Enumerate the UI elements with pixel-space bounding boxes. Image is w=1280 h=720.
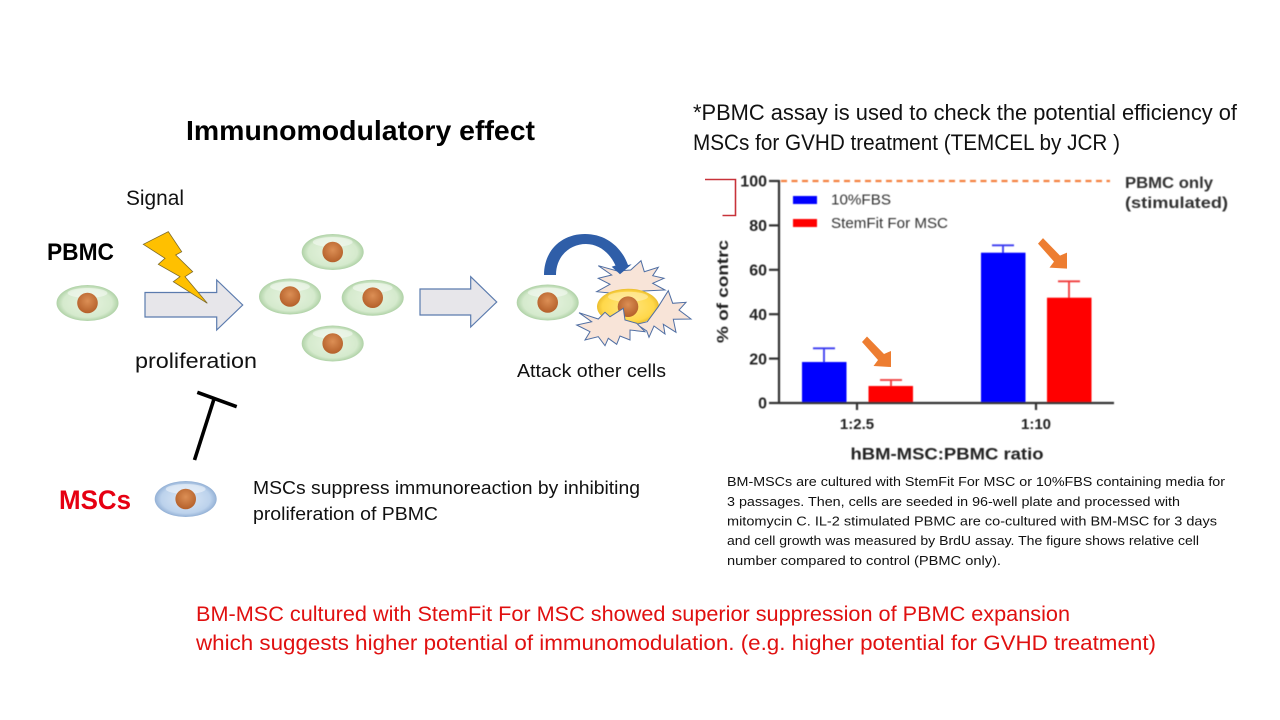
legend xyxy=(793,192,948,232)
x tick labels xyxy=(840,416,1051,433)
red bracket xyxy=(705,180,736,216)
icon: attacking cell xyxy=(517,284,579,320)
arrow: proliferation xyxy=(145,280,243,330)
conclusion: which suggests higher potential of immunomodulation. (e.g. higher potential for GVHD treatment) xyxy=(195,631,1156,655)
text: methods paragraph: number compared to control (PBMC only). xyxy=(727,553,1001,568)
label: PBMC only xyxy=(1125,175,1228,212)
y tick labels: 40 xyxy=(749,307,767,324)
label: attack other cells: Attack other cells xyxy=(517,361,666,381)
group: proliferated cells xyxy=(259,234,404,362)
arrow: orange high ratio xyxy=(1038,238,1067,269)
label: PBMC only: (stimulated) xyxy=(1125,195,1228,212)
note: PBMC assay: MSCs for GVHD treatment (TEMCEL by JCR ) xyxy=(693,130,1120,155)
note: PBMC assay: *PBMC assay is used to check the potential efficiency of xyxy=(693,100,1238,125)
error bars xyxy=(813,245,1080,386)
label: MSCs: MSCs xyxy=(59,485,131,515)
label: Signal: Signal xyxy=(126,187,184,210)
y tick labels: 100 xyxy=(740,174,767,191)
title: Immunomodulatory effect xyxy=(186,115,535,146)
note: PBMC assay xyxy=(693,100,1238,155)
label: PBMC: PBMC xyxy=(47,239,114,266)
inhibition symbol xyxy=(194,392,237,460)
text: methods paragraph xyxy=(727,474,1226,568)
arrow: curved attack xyxy=(544,234,632,275)
text: MSC description: proliferation of PBMC xyxy=(253,503,438,524)
y tick labels xyxy=(740,174,767,413)
bar chart xyxy=(715,174,1228,463)
text: methods paragraph: and cell growth was measured by BrdU assay. The figure shows relative cell xyxy=(727,533,1199,548)
icon: lightning signal xyxy=(143,232,207,303)
icon: target cell xyxy=(597,289,659,325)
arrow: to attack xyxy=(420,277,497,327)
y axis title: % of contrc xyxy=(715,240,732,343)
text: MSC description xyxy=(253,477,640,524)
icon: MSC cell xyxy=(155,481,217,517)
y axis xyxy=(769,180,779,404)
y tick labels: 0 xyxy=(758,396,767,413)
text: methods paragraph: BM-MSCs are cultured with StemFit For MSC or 10%FBS containing media for xyxy=(727,474,1226,489)
x tick labels: 1:2.5 xyxy=(840,416,874,433)
conclusion xyxy=(195,602,1156,655)
label: PBMC only: PBMC only xyxy=(1125,175,1213,192)
text: methods paragraph: mitomycin C. IL-2 stimulated PBMC are co-cultured with BM-MSC for 3 days xyxy=(727,514,1218,528)
arrow: orange low ratio xyxy=(862,336,891,367)
x axis title: hBM-MSC:PBMC ratio xyxy=(850,446,1044,464)
legend: StemFit For MSC xyxy=(831,216,948,232)
y tick labels: 60 xyxy=(749,262,767,280)
reference line: PBMC only xyxy=(781,180,1110,182)
bars xyxy=(802,253,1092,403)
legend: 10%FBS xyxy=(831,192,891,208)
icon: burst bottom xyxy=(577,308,645,346)
text: MSC description: MSCs suppress immunoreaction by inhibiting xyxy=(253,477,640,498)
x tick labels: 1:10 xyxy=(1021,416,1051,433)
x axis xyxy=(779,403,1114,410)
text: methods paragraph: 3 passages. Then, cells are seeded in 96-well plate and processed with xyxy=(727,494,1180,509)
y tick labels: 20 xyxy=(749,351,767,368)
icon: burst right xyxy=(637,291,691,337)
icon: burst behind target xyxy=(597,261,665,293)
y tick labels: 80 xyxy=(749,218,767,235)
icon: PBMC cell xyxy=(56,285,118,321)
conclusion: BM-MSC cultured with StemFit For MSC showed superior suppression of PBMC expansion xyxy=(196,602,1070,626)
label: proliferation: proliferation xyxy=(135,350,257,373)
